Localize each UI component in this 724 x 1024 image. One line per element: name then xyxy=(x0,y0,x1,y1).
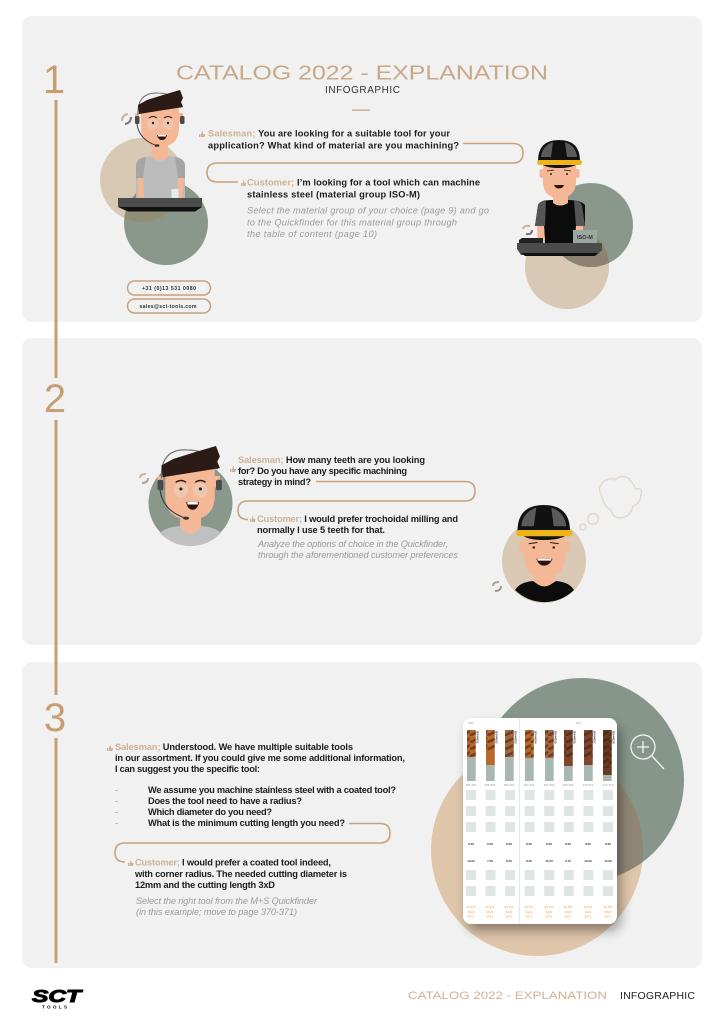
page numbers xyxy=(468,721,581,725)
tool vertical labels: BS44054 xyxy=(534,731,538,744)
order codes: 42 371 xyxy=(504,905,514,909)
diameter values: 8.00 xyxy=(546,842,552,846)
logo: SCT Tools xyxy=(32,986,83,1010)
order codes: 42 371 xyxy=(603,905,613,909)
diameter values: 8.00 xyxy=(526,842,532,846)
illustration: salesman at desk xyxy=(100,90,208,265)
length values: 7.00 xyxy=(487,859,493,863)
tool vertical labels: BS44051 xyxy=(476,731,480,744)
tool codes: 368 369 xyxy=(485,783,496,787)
instruction text 3: Select the right tool from the M+S Quickfinder xyxy=(136,896,318,906)
order codes: 3021 xyxy=(506,910,513,914)
text block: customer 3 xyxy=(128,858,347,890)
order codes: 3071 xyxy=(565,914,572,918)
panel: step 1 xyxy=(22,16,702,322)
icon: refresh xyxy=(523,226,532,234)
diameter values xyxy=(468,842,611,846)
instruction text 1: to the Quickfinder for this material group through xyxy=(247,218,457,228)
instruction text 2: Analyze the options of choice in the Quickfinder, xyxy=(257,539,448,549)
panel: step 2 xyxy=(22,338,702,645)
illustration: background circles xyxy=(431,678,684,956)
page numbers: 371 xyxy=(576,721,581,725)
order codes: 3071 xyxy=(468,914,475,918)
text block: customer 2: normally I use 5 teeth for that. xyxy=(257,525,385,535)
subtitle: INFOGRAPHIC xyxy=(325,85,400,96)
question list: Which diameter do you need? xyxy=(148,807,272,817)
logo: SCT Tools: SCT xyxy=(32,986,83,1006)
order codes: 3021 xyxy=(585,910,592,914)
title divider xyxy=(352,110,370,111)
tool vertical labels: BS44053 xyxy=(514,731,518,744)
contact pill: phone: +31 (0)13 531 0080 xyxy=(142,286,196,292)
panel: step 3 xyxy=(22,662,702,968)
tool codes: 368 369 xyxy=(563,783,574,787)
instruction text 1: the table of content (page 10) xyxy=(247,229,377,239)
text block: salesman 2: strategy in mind? xyxy=(238,477,311,487)
tool vertical labels xyxy=(476,731,616,744)
tool codes: 362 363 xyxy=(524,783,535,787)
order codes: 3071 xyxy=(487,914,494,918)
text block: customer 3: Customer; I would prefer a coated tool indeed, xyxy=(135,858,331,868)
step number 2: 2 xyxy=(44,377,66,421)
order codes: 3021 xyxy=(487,910,494,914)
tool vertical labels: BS44056 xyxy=(572,731,576,744)
connector 2 xyxy=(238,482,475,520)
length values: 8.00 xyxy=(506,859,512,863)
order codes: 3021 xyxy=(526,910,533,914)
logo: SCT Tools: TOOLS xyxy=(42,1004,67,1010)
illustration: salesman portrait xyxy=(148,446,232,546)
step number 1: 1 xyxy=(43,58,65,102)
connector 1 xyxy=(207,144,523,182)
icon: refresh xyxy=(140,474,148,483)
text block: salesman 2: Salesman; How many teeth are you looking xyxy=(238,455,425,465)
spec icon rows xyxy=(466,795,613,891)
text block: customer 1 xyxy=(241,178,480,200)
tool vertical labels: BS44052 xyxy=(494,731,498,744)
text block: customer 1: Customer; I’m looking for a tool which can machine xyxy=(247,178,480,188)
text block: customer 2 xyxy=(250,514,458,535)
diameter values: 8.00 xyxy=(506,842,512,846)
order codes: 42 371 xyxy=(583,905,593,909)
length values: 12.60 xyxy=(604,859,612,863)
order codes: 3071 xyxy=(506,914,513,918)
length values: 9.70 xyxy=(565,859,571,863)
tool codes: 370 371 xyxy=(583,783,594,787)
footer subtitle: INFOGRAPHIC xyxy=(620,990,695,1002)
order codes xyxy=(466,905,613,918)
diameter values: 6.00 xyxy=(468,842,474,846)
illustration: customer portrait xyxy=(502,505,586,603)
order codes: 3071 xyxy=(546,914,553,918)
timeline: vertical line xyxy=(54,100,58,963)
text block: salesman 3 xyxy=(107,742,405,774)
question list xyxy=(115,785,396,828)
instruction text 2 xyxy=(257,539,458,560)
instruction text 3 xyxy=(136,896,318,917)
diameter values: 8.00 xyxy=(585,842,591,846)
length values xyxy=(467,859,612,863)
question list: We assume you machine stainless steel with a coated tool? xyxy=(148,785,396,795)
instruction text 3: (in this example; move to page 370-371) xyxy=(136,907,297,917)
text block: salesman 1: Salesman; You are looking for a suitable tool for your xyxy=(208,128,450,138)
icon: thought bubble xyxy=(580,476,641,530)
length values: 8.00 xyxy=(526,859,532,863)
illustration: customer at desk xyxy=(517,140,633,309)
length values: 10.60 xyxy=(584,859,592,863)
diameter values: 8.00 xyxy=(565,842,571,846)
order codes: 3021 xyxy=(605,910,612,914)
illustration: customer at desk: ISO-M xyxy=(577,235,593,241)
contact pill: phone xyxy=(128,281,210,295)
text block: customer 1: stainless steel (material group ISO-M) xyxy=(247,190,420,200)
text block: customer 2: Customer; I would prefer trochoidal milling and xyxy=(257,514,458,524)
tool vertical labels: BS44055 xyxy=(554,731,558,744)
title: CATALOG 2022 - EXPLANATION xyxy=(176,62,548,84)
tool vertical labels: BS44058 xyxy=(612,731,616,744)
contact pill: email xyxy=(128,299,210,313)
instruction text 2: through the aforementioned customer preferences xyxy=(258,550,458,560)
diameter values: 8.00 xyxy=(605,842,611,846)
tool codes: 372 373 xyxy=(603,783,614,787)
icon: magnifier xyxy=(631,735,664,769)
tool images xyxy=(467,730,612,781)
question list: Does the tool need to have a radius? xyxy=(148,796,302,806)
length values: 13.00 xyxy=(467,859,475,863)
text block: customer 3: with corner radius. The needed cutting diameter is xyxy=(134,869,347,879)
step number 3: 3 xyxy=(44,696,66,740)
text block: salesman 1 xyxy=(199,128,459,150)
text block: salesman 2: for? Do you have any specific machining xyxy=(238,466,407,476)
diameter values: 6.00 xyxy=(487,842,493,846)
order codes: 3071 xyxy=(585,914,592,918)
icon: refresh xyxy=(122,114,131,124)
length values: 12.00 xyxy=(545,859,553,863)
text block: salesman 3: I can suggest you the specific tool: xyxy=(115,764,260,774)
text block: salesman 2 xyxy=(230,455,425,487)
tool codes xyxy=(466,783,614,787)
instruction text 1 xyxy=(247,206,489,239)
order codes: 3071 xyxy=(605,914,612,918)
tool codes: 364 365 xyxy=(544,783,555,787)
order codes: 3021 xyxy=(468,910,475,914)
icon: refresh xyxy=(493,582,501,591)
tool codes: 360 361 xyxy=(504,783,515,787)
tool vertical labels: BS44057 xyxy=(592,731,596,744)
connector 3 xyxy=(115,824,390,862)
instruction text 1: Select the material group of your choice (page 9) and go xyxy=(247,206,489,216)
order codes: 42 371 xyxy=(524,905,534,909)
order codes: 42 371 xyxy=(544,905,554,909)
text block: salesman 3: in our assortment. If you could give me some additional information, xyxy=(115,753,405,763)
text block: customer 3: 12mm and the cutting length 3xD xyxy=(135,880,275,890)
order codes: 3071 xyxy=(526,914,533,918)
order codes: 3021 xyxy=(546,910,553,914)
text block: salesman 1: application? What kind of material are you machining? xyxy=(208,140,459,150)
catalog page card xyxy=(463,718,620,930)
question list: What is the minimum cutting length you need? xyxy=(148,818,345,828)
page numbers: 370 xyxy=(468,721,473,725)
order codes: 3021 xyxy=(565,910,572,914)
contact pill: email: sales@sct-tools.com xyxy=(140,304,197,310)
tool codes: 366 367 xyxy=(466,783,477,787)
footer title: CATALOG 2022 - EXPLANATION xyxy=(408,990,607,1002)
order codes: 42 371 xyxy=(466,905,476,909)
text block: salesman 3: Salesman; Understood. We have multiple suitable tools xyxy=(115,742,353,752)
order codes: 42 371 xyxy=(485,905,495,909)
order codes: 42 371 xyxy=(563,905,573,909)
